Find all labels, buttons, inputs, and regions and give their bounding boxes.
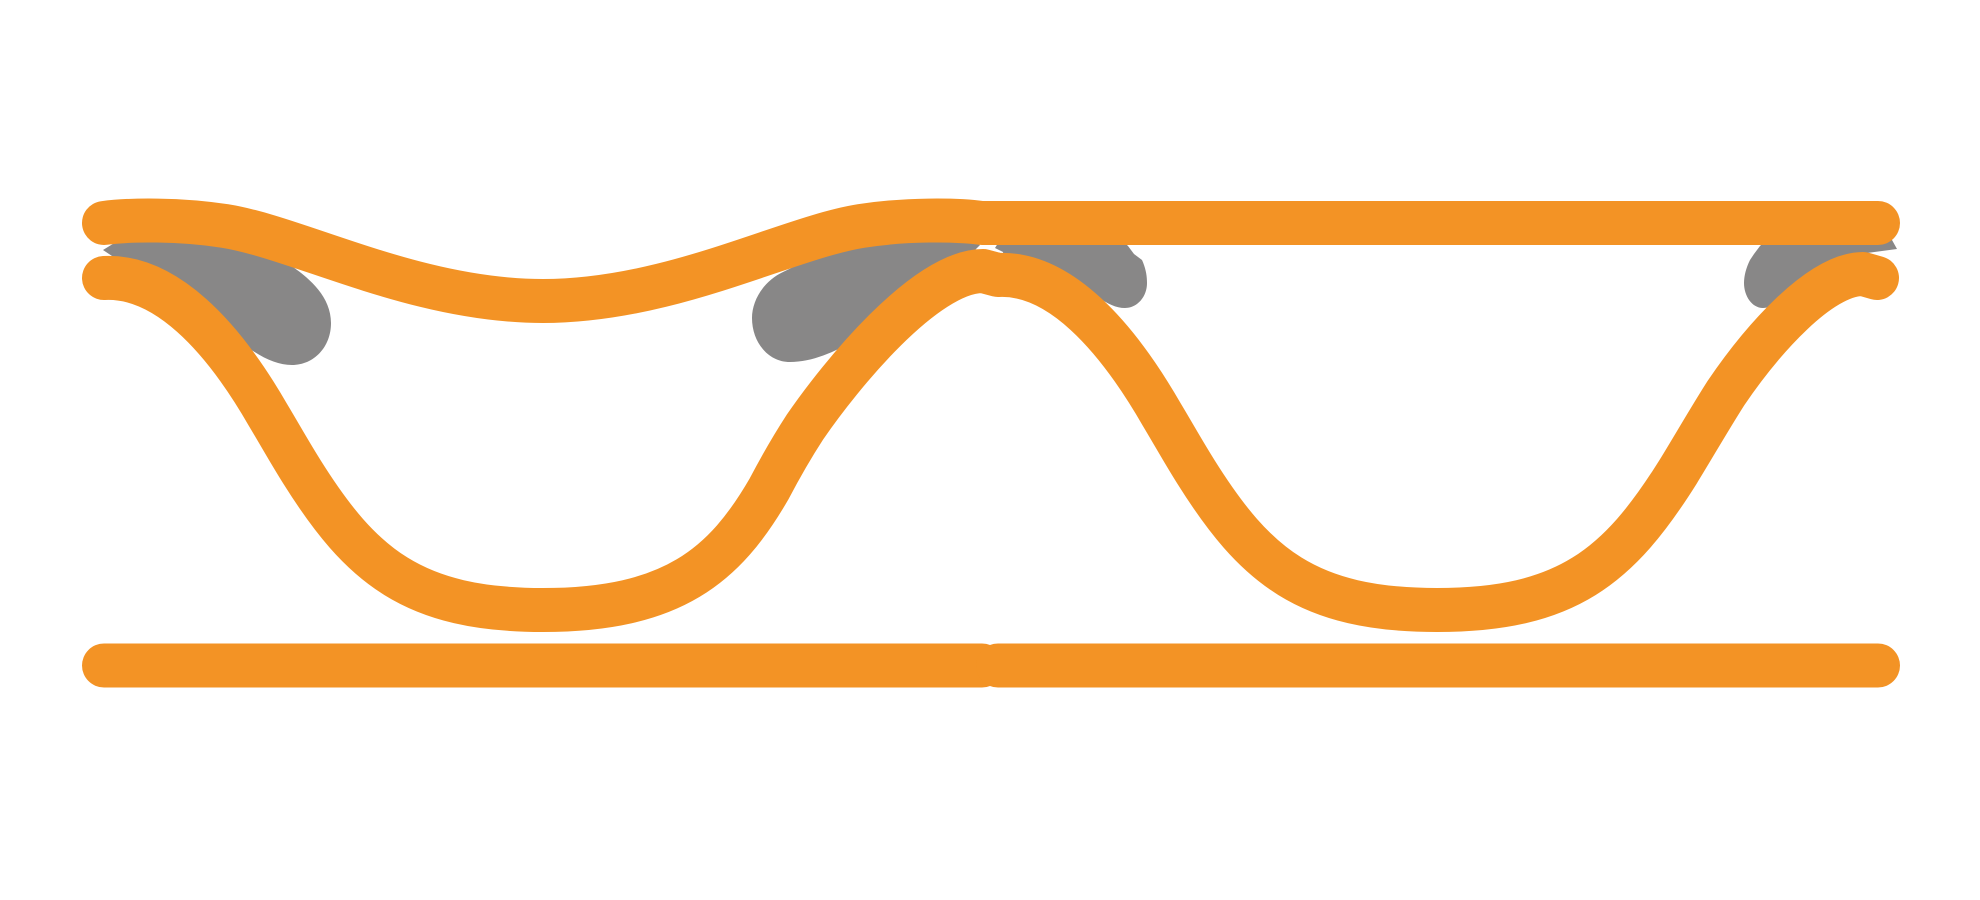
corrugated middle layer — [104, 271, 1877, 610]
top wavy layer — [104, 221, 1878, 301]
bottom layer: left segment — [104, 644, 982, 688]
grey fill: left-hand wedge — [103, 230, 331, 365]
bottom layer: right segment — [998, 644, 1878, 688]
grey fill: right-hand wedge — [1744, 240, 1897, 323]
grey fill: centre-left wedge — [752, 230, 980, 362]
grey fill: centre-right wedge — [995, 240, 1147, 329]
